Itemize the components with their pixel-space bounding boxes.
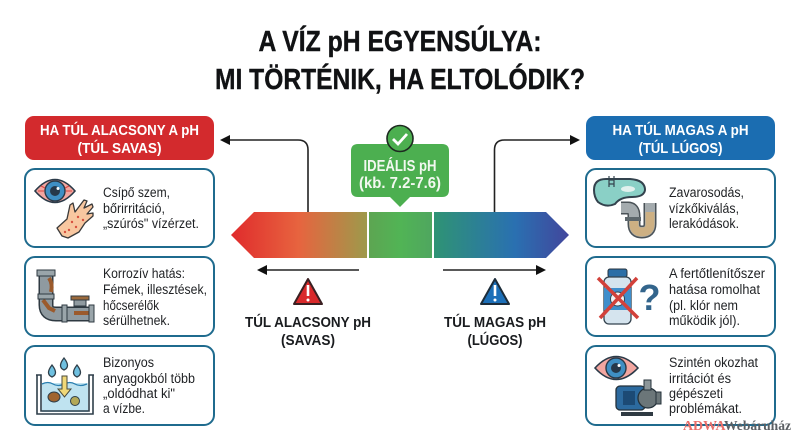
text: irritation and machinery: Szintén okozhat — [669, 355, 758, 370]
text: disinfectant — [669, 266, 765, 328]
watermark: ADWAWebáruház — [683, 419, 791, 434]
text: irritation: „szúrós" vízérzet. — [103, 216, 199, 231]
icon: cloudy pool — [594, 176, 645, 206]
text: leaching: a vízbe. — [103, 401, 145, 416]
label: too high pH: TÚL MAGAS pH — [444, 313, 546, 331]
icon: pump — [616, 380, 661, 416]
text: corrosion: Korrozív hatás: — [103, 266, 185, 281]
heading: too high pH: (TÚL LÚGOS) — [638, 139, 722, 157]
text: corrosion: sérülhetnek. — [103, 313, 170, 328]
heading: too high pH: HA TÚL MAGAS A pH — [612, 121, 748, 139]
text: corrosion: Fémek, illesztések, — [103, 282, 207, 297]
text: leaching: anyagokból több — [103, 371, 195, 386]
arrow: scale to too low panel — [220, 135, 308, 212]
text: cloudiness: vízkőkiválás, — [669, 201, 739, 216]
text: cloudiness — [669, 185, 744, 231]
card: irritated eye and skin — [25, 169, 214, 247]
arrow: toward alkaline — [443, 265, 546, 275]
card: cloudiness and scale — [586, 169, 775, 247]
heading: too low pH: HA TÚL ALACSONY A pH — [40, 121, 199, 139]
card: leaching — [25, 346, 214, 425]
text: disinfectant: (pl. klór nem — [669, 298, 738, 313]
label: too low pH: TÚL ALACSONY pH — [245, 313, 371, 331]
icon: rusty pipe — [37, 270, 94, 322]
text: leaching: „oldódhat ki" — [103, 386, 175, 401]
arrow: toward acidic — [257, 265, 359, 275]
icon: red eye — [595, 356, 638, 380]
heading: too low pH: (TÚL SAVAS) — [78, 139, 162, 157]
text: irritation: bőrirritáció, — [103, 201, 165, 216]
text: corrosion: hőcserélők — [103, 298, 159, 313]
icon: red eye — [35, 180, 75, 202]
text: irritation and machinery: problémákat. — [669, 401, 742, 416]
heading: too high pH — [586, 116, 775, 160]
icon: disinfectant bottle crossed out — [598, 269, 638, 324]
chart: pH gradient scale — [231, 212, 569, 258]
text: leaching: Bizonyos — [103, 355, 154, 370]
card: corrosion — [25, 257, 214, 336]
callout: ideal pH: (kb. 7.2-7.6) — [359, 175, 441, 192]
label: too high pH: (LÚGOS) — [468, 331, 523, 349]
title — [215, 24, 585, 96]
icon: clogged trap — [621, 203, 650, 232]
icon: question mark: ? — [638, 277, 660, 318]
text: disinfectant: működik jól). — [669, 313, 740, 328]
title: MI TÖRTÉNIK, HA ELTOLÓDIK? — [215, 62, 585, 96]
text: irritation and machinery: irritációt és — [669, 371, 731, 386]
panel: too high pH column — [586, 116, 775, 425]
text: irritation: Csípő szem, — [103, 185, 170, 200]
heading: too low pH — [25, 116, 214, 160]
text: disinfectant: hatása romolhat — [669, 282, 760, 297]
text: leaching — [103, 355, 195, 416]
text: cloudiness: lerakódások. — [669, 216, 739, 231]
label: too high pH — [444, 313, 546, 349]
icon: blue warning triangle — [481, 279, 509, 304]
text: cloudiness: Zavarosodás, — [669, 185, 744, 200]
text: corrosion — [103, 266, 207, 328]
text: disinfectant: A fertőtlenítőszer — [669, 266, 765, 281]
panel: too low pH column — [25, 116, 214, 425]
text: irritation and machinery — [669, 355, 758, 416]
label: too low pH — [245, 313, 371, 349]
icon: red warning triangle — [294, 279, 322, 304]
icon: irritated hand — [57, 200, 93, 238]
card: disinfectant — [586, 257, 775, 336]
text: irritation and machinery: gépészeti — [669, 386, 723, 401]
callout: ideal pH: IDEÁLIS pH — [364, 158, 436, 175]
card: irritation and machinery — [586, 346, 775, 425]
label: too low pH: (SAVAS) — [281, 332, 335, 349]
callout: ideal pH — [351, 126, 449, 207]
arrow: scale to too high panel — [494, 135, 580, 212]
title: A VÍZ pH EGYENSÚLYA: — [258, 24, 542, 58]
icon: basin with drops — [36, 358, 94, 414]
icon: check mark — [387, 126, 413, 152]
text: irritation — [103, 185, 199, 231]
